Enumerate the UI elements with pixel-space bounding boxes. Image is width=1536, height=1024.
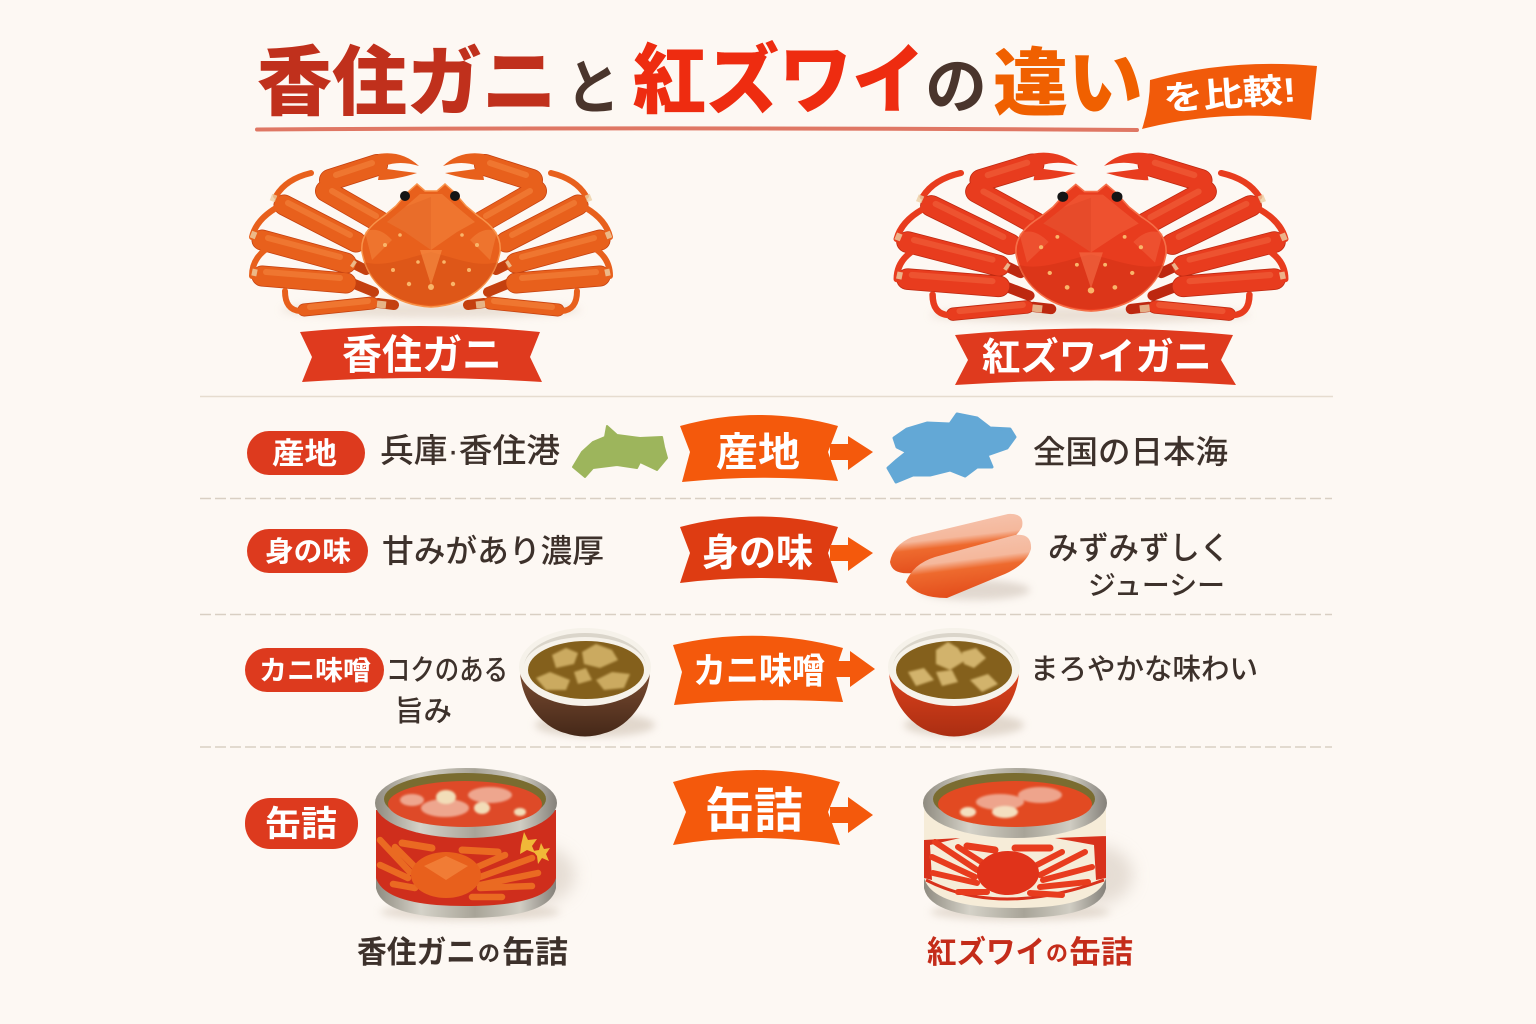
ribbon: canned crab: 缶詰 <box>705 785 803 838</box>
text: red snow crab can <box>927 935 1133 970</box>
label crab <box>380 840 538 898</box>
ribbon: crab miso <box>673 636 843 705</box>
map: Hyogo <box>573 426 667 477</box>
title: の <box>925 53 987 122</box>
ribbon: origin <box>680 415 838 482</box>
ribbon: origin: 産地 <box>716 431 800 475</box>
text: red snow crab meat: みずみずしく <box>1048 530 1230 566</box>
label crab <box>932 842 1092 895</box>
row: canned crab <box>245 768 1133 970</box>
crab: Kasumi <box>251 153 611 318</box>
arrow: origin <box>830 436 873 470</box>
icon: red miso bowl <box>888 628 1024 737</box>
text: Kasumi can: 香住ガニ <box>357 935 476 970</box>
pill: crab miso: カニ味噌 <box>259 656 371 686</box>
arrow: meat flavour <box>830 537 873 571</box>
row: origin <box>247 414 1228 482</box>
text: red snow crab can: の <box>1046 941 1068 966</box>
title: 違い <box>993 42 1143 125</box>
text: red snow crab origin: 全国の日本海 <box>1033 434 1228 470</box>
text: Kasumi origin: 兵庫·香住港 <box>380 432 560 469</box>
text: Kasumi miso: 旨み <box>395 696 452 728</box>
ribbon: red snow crab: 紅ズワイガニ <box>982 336 1212 379</box>
text: Kasumi can <box>357 935 568 970</box>
badge: comparison <box>1142 64 1317 129</box>
title: 紅ズワイ <box>633 39 925 124</box>
row: crab miso <box>245 628 1258 737</box>
ribbon: red snow crab <box>955 328 1236 385</box>
text: Kasumi miso: コクのある <box>386 655 508 687</box>
text: red snow crab meat: ジューシー <box>1088 571 1225 601</box>
pill: origin: 産地 <box>272 438 337 471</box>
title <box>257 39 1143 126</box>
text: Kasumi can: の <box>478 941 500 966</box>
icon: Kasumi can <box>375 768 575 921</box>
arrow: crab miso <box>832 651 875 687</box>
pill: canned crab <box>245 798 358 849</box>
pill: meat flavour: 身の味 <box>265 536 351 567</box>
ribbon: Kasumi crab: 香住ガニ <box>342 332 502 378</box>
text: red snow crab miso: まろやかな味わい <box>1030 653 1258 686</box>
pill: origin <box>247 431 365 475</box>
ribbon: meat flavour: 身の味 <box>702 533 813 575</box>
text: red snow crab can: 缶詰 <box>1069 935 1133 970</box>
ribbon: crab miso: カニ味噌 <box>693 650 825 691</box>
ribbon: meat flavour <box>680 516 838 583</box>
map: Sea of Japan coast <box>888 414 1015 482</box>
text: Kasumi can: 缶詰 <box>502 935 568 970</box>
pill: canned crab: 缶詰 <box>265 805 337 844</box>
ribbon: canned crab <box>673 770 840 845</box>
title underline <box>257 128 1137 130</box>
ribbon: Kasumi crab <box>300 326 542 382</box>
text: red snow crab meat <box>1048 530 1230 601</box>
title: 香住ガニ <box>257 41 557 126</box>
icon: red snow crab can <box>923 768 1133 921</box>
crab: red snow crab <box>896 153 1286 323</box>
badge: comparison: を比較! <box>1162 71 1297 118</box>
title: と <box>566 55 620 122</box>
row: meat flavour <box>247 514 1230 601</box>
icon: crab meat <box>890 514 1031 600</box>
pill: crab miso <box>245 648 384 692</box>
text: red snow crab can: 紅ズワイ <box>927 935 1045 970</box>
text: Kasumi meat: 甘みがあり濃厚 <box>382 533 604 569</box>
text: Kasumi miso <box>386 655 508 728</box>
arrow: canned crab <box>830 797 873 833</box>
icon: brown miso bowl <box>519 628 655 737</box>
pill: meat flavour <box>247 529 368 573</box>
